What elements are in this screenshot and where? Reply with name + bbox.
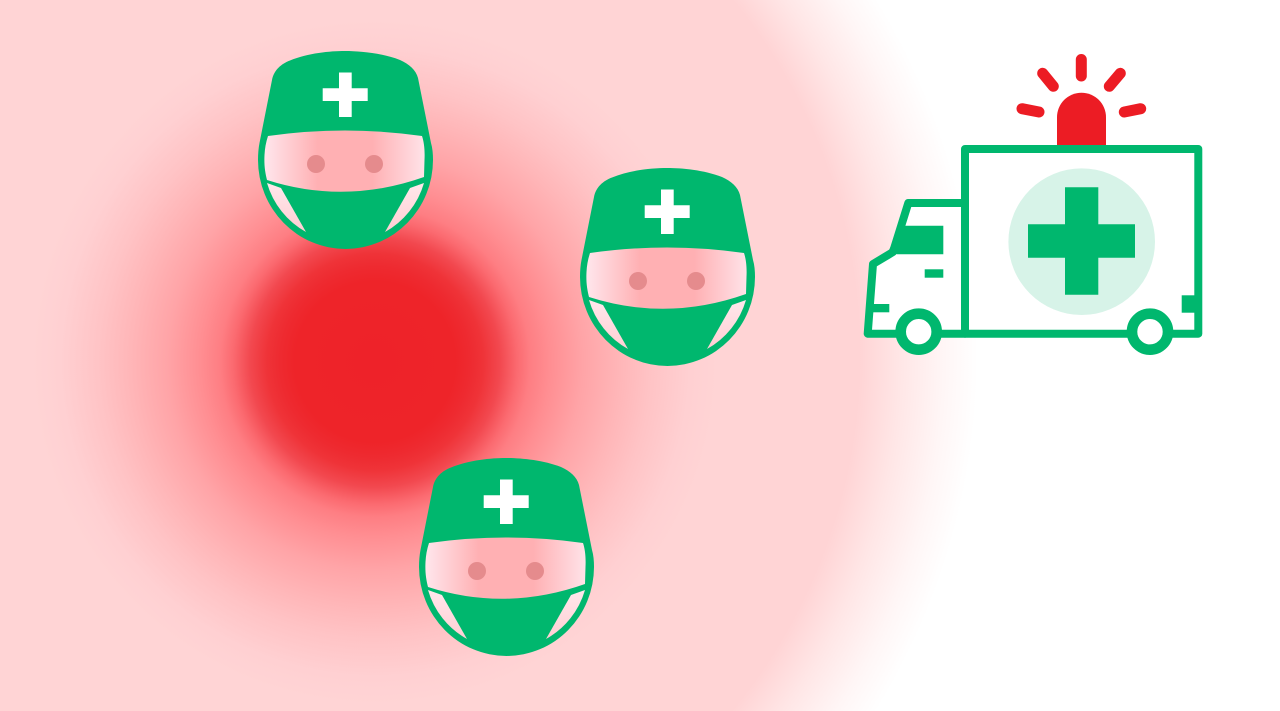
left mask gap [267, 183, 306, 232]
left mask gap [589, 300, 628, 349]
medic head and cap [258, 51, 433, 249]
cap cross [323, 72, 368, 117]
siren rays [1022, 60, 1141, 112]
rear wheel [1132, 314, 1168, 350]
rear light [1182, 295, 1196, 313]
right eye [365, 155, 383, 173]
right eye [687, 272, 705, 290]
left mask gap [428, 590, 467, 639]
door handle [925, 269, 943, 278]
right mask gap [707, 300, 746, 349]
cap cross [645, 190, 690, 234]
icon: medic right [580, 168, 755, 366]
left eye [307, 155, 325, 173]
medic head and cap [419, 458, 594, 656]
face opening [425, 538, 586, 599]
front wheel [901, 314, 937, 350]
icon: medic top [258, 51, 433, 249]
front bumper [871, 304, 889, 312]
icon: medic bottom [419, 458, 594, 656]
right eye [526, 562, 544, 580]
cargo box [965, 149, 1198, 334]
medic head and cap [580, 168, 755, 366]
cab window [889, 226, 943, 254]
right mask gap [385, 183, 424, 232]
siren light [1057, 93, 1106, 146]
face opening [264, 130, 425, 192]
cross badge circle [1008, 168, 1155, 315]
right mask gap [546, 590, 585, 639]
left eye [629, 272, 647, 290]
left eye [468, 562, 486, 580]
icon: ambulance [868, 60, 1198, 350]
cab [868, 203, 965, 334]
cap cross [484, 480, 529, 524]
cross badge [1028, 187, 1135, 295]
face opening [586, 248, 747, 309]
